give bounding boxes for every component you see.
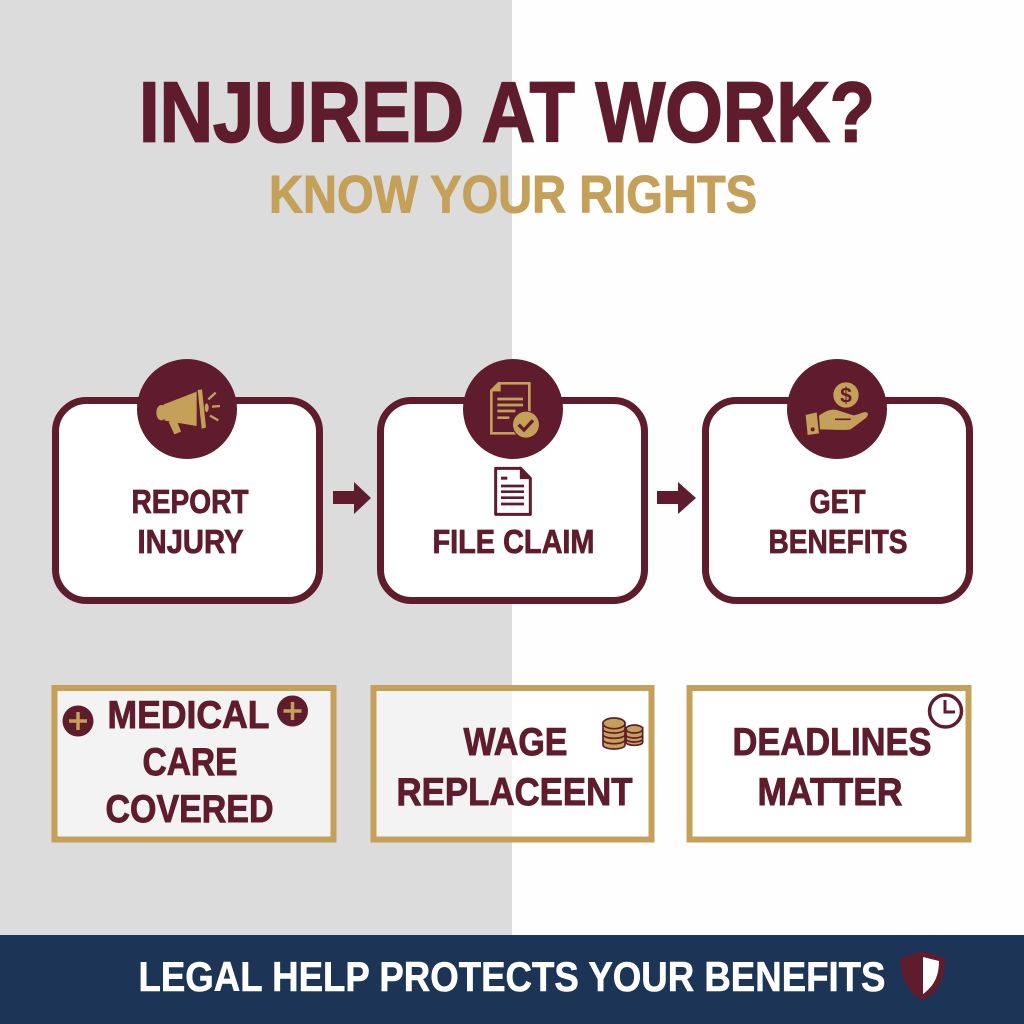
icon: hand with coin [787, 359, 887, 459]
label: replaceent: REPLACEENT [396, 771, 633, 814]
panel: deadlines matter [690, 688, 968, 840]
label: benefits: BENEFITS [768, 523, 908, 560]
icon: dollar sign: $ [840, 384, 852, 408]
panel: medical care covered [54, 688, 334, 840]
icon: plus left [62, 706, 94, 736]
panel: file claim [380, 359, 644, 600]
panel: report injury [56, 359, 320, 600]
icon: megaphone [137, 359, 237, 459]
icon: document with check [463, 359, 563, 459]
label: injury: INJURY [138, 523, 244, 560]
footer text: LEGAL HELP PROTECTS YOUR BENEFITS [138, 953, 886, 1000]
label: matter: MATTER [758, 771, 902, 814]
label: deadlines: DEADLINES [732, 721, 932, 764]
icon: small document [496, 468, 530, 514]
title: INJURED AT WORK? [139, 66, 875, 160]
label: file claim: FILE CLAIM [432, 523, 594, 560]
footer banner [0, 935, 1024, 1024]
panel: get benefits [706, 359, 970, 600]
subtitle: KNOW YOUR RIGHTS [269, 166, 757, 224]
label: covered: COVERED [106, 788, 274, 831]
panel: wage replacement [374, 688, 652, 840]
icon: clock [930, 695, 962, 727]
label: report: REPORT [132, 483, 248, 520]
label: get: GET [810, 483, 866, 520]
label: care: CARE [142, 741, 238, 784]
icon: plus right [277, 696, 308, 726]
arrow: step one to two [333, 482, 371, 514]
arrow: step two to three [657, 482, 696, 514]
icon: shield [901, 951, 945, 1000]
label: medical: MEDICAL [108, 694, 270, 737]
icon: coins [603, 718, 643, 749]
label: wage: WAGE [464, 721, 568, 764]
